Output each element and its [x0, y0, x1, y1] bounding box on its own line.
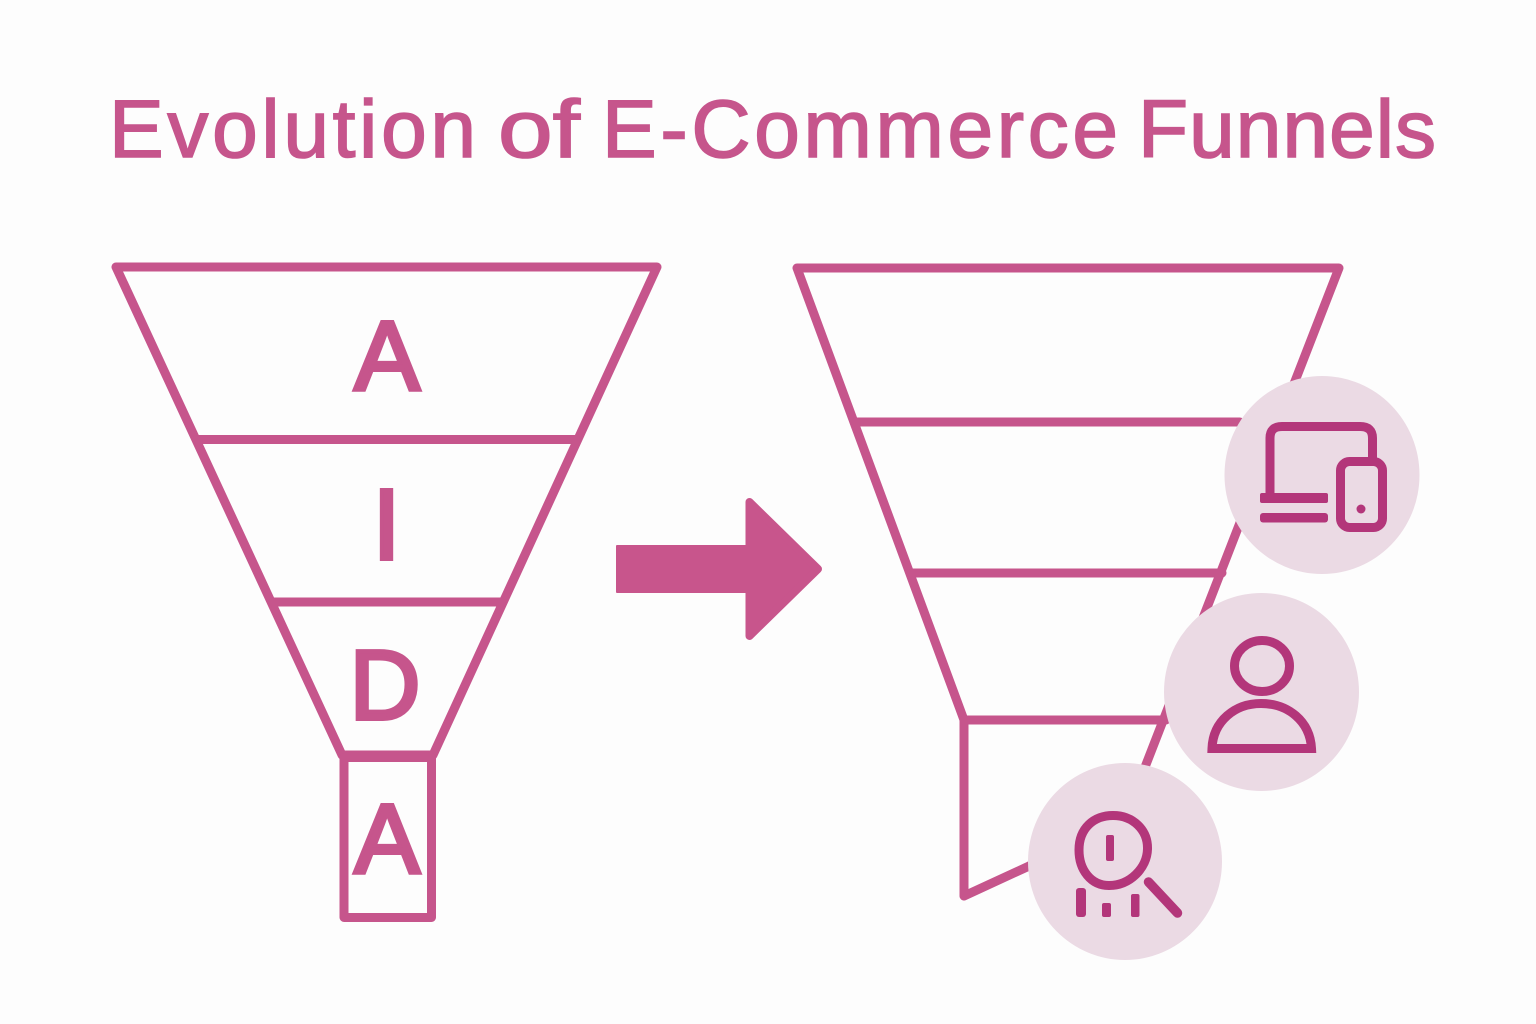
person circle — [1164, 593, 1359, 791]
letter A bottom: A — [354, 784, 420, 894]
funnel outline — [116, 267, 657, 755]
modern funnel divider 2 — [912, 568, 1222, 578]
title: of — [498, 84, 580, 175]
arrow — [616, 502, 818, 636]
devices circle — [1224, 376, 1420, 574]
title: Funnels — [1138, 84, 1436, 175]
search circle — [1028, 763, 1222, 960]
letter I: I — [373, 469, 400, 581]
modern funnel divider 3 — [964, 716, 1166, 724]
funnel spout — [344, 758, 432, 918]
title — [109, 84, 1436, 175]
modern funnel divider 1 — [856, 418, 1240, 426]
title: Evolution — [109, 84, 476, 175]
icon: person — [1164, 593, 1359, 791]
modern funnel — [797, 268, 1339, 896]
AIDA funnel — [116, 267, 657, 918]
modern funnel outline — [797, 268, 1339, 896]
title: E-Commerce — [602, 84, 1118, 175]
icon: analytics search — [1028, 763, 1222, 960]
icon: devices — [1224, 376, 1420, 574]
letter D: D — [350, 630, 420, 740]
funnel divider: desire — [273, 598, 501, 606]
funnel divider: interest — [197, 435, 576, 444]
letter A: A — [354, 301, 420, 411]
